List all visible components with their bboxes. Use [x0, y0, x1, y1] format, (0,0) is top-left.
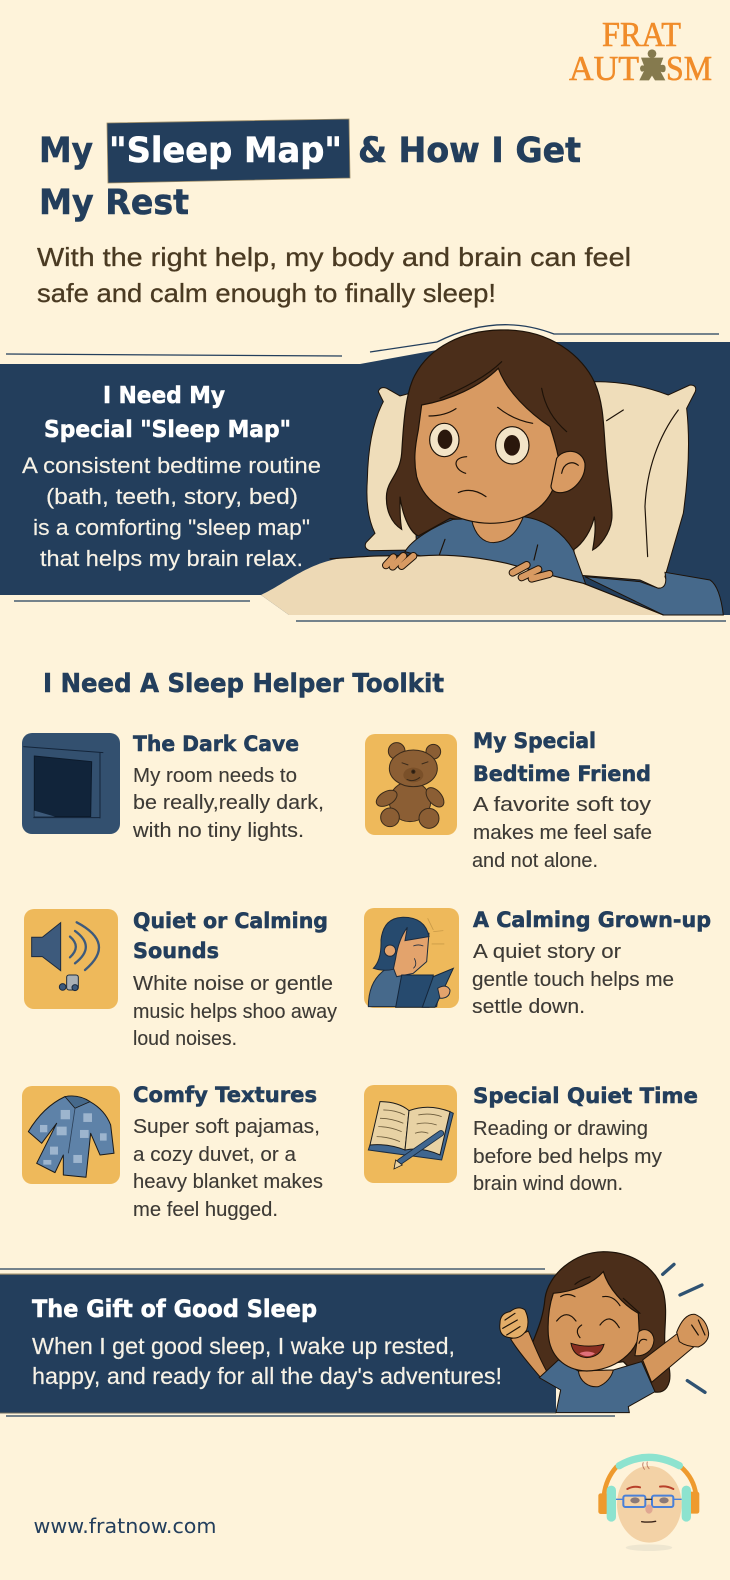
icon: pajamas — [22, 1086, 120, 1184]
title: "Sleep Map" — [109, 131, 342, 171]
text: Comfy Textures — [133, 1083, 323, 1221]
panel: sleep map band — [0, 325, 730, 621]
text: The Dark Cave: with no tiny lights. — [132, 820, 304, 842]
text: Comfy Textures: a cozy duvet, or a — [133, 1144, 297, 1166]
text: Quiet or Calming Sounds: music helps shoo away — [133, 1001, 337, 1023]
icon: grown-up reading — [364, 908, 459, 1008]
icon: mascot with headphones — [598, 1457, 699, 1551]
text: bedtime routine description: (bath, teeth, story, bed) — [46, 484, 298, 509]
section heading: toolkit: I Need A Sleep Helper Toolkit — [43, 669, 444, 699]
text: Quiet or Calming Sounds: White noise or gentle — [133, 973, 333, 995]
title: & How I Get — [358, 131, 581, 171]
icon: speaker — [24, 909, 118, 1009]
heading: I Need My Special Sleep Map: Special "Sleep Map" — [44, 417, 291, 443]
text: Quiet or Calming Sounds — [133, 909, 337, 1050]
right hand — [513, 565, 549, 579]
text: Quiet or Calming Sounds: Sounds — [133, 939, 219, 963]
text: The Dark Cave — [132, 732, 324, 842]
logo: Frat Autism: FRAT — [602, 15, 681, 54]
logo: Frat Autism: AUT — [569, 49, 639, 88]
item: Quiet or Calming Sounds — [24, 909, 337, 1050]
icon: teddy bear — [365, 734, 457, 835]
text: My Special Bedtime Friend: makes me feel safe — [473, 822, 652, 844]
text: Special Quiet Time: brain wind down. — [473, 1173, 623, 1195]
text: My Special Bedtime Friend: and not alone. — [472, 850, 598, 872]
left hand — [386, 556, 413, 567]
text: The Dark Cave: My room needs to — [133, 765, 297, 787]
website url: www.fratnow.com — [34, 1514, 217, 1538]
text: The Dark Cave: The Dark Cave — [133, 732, 299, 756]
heading: I Need My Special Sleep Map — [44, 383, 291, 443]
illustration: worried girl in bed — [261, 330, 723, 615]
title: My — [39, 131, 93, 171]
text: A Calming Grown-up: gentle touch helps me — [472, 969, 674, 991]
text: A Calming Grown-up: A Calming Grown-up — [473, 908, 711, 932]
text: good sleep description: When I get good sleep, I wake up rested, — [32, 1333, 455, 1359]
text: My Special Bedtime Friend — [472, 729, 652, 872]
subtitle — [37, 242, 631, 308]
title — [39, 119, 581, 223]
text: bedtime routine description — [22, 453, 321, 571]
item: The Dark Cave — [22, 732, 324, 842]
text: My Special Bedtime Friend: Bedtime Friend — [473, 762, 651, 786]
text: Special Quiet Time: Special Quiet Time — [473, 1084, 698, 1108]
text: A Calming Grown-up: A quiet story or — [473, 941, 621, 963]
text: Special Quiet Time: Reading or drawing — [473, 1118, 648, 1140]
logo: Frat Autism: SM — [666, 49, 712, 88]
item: A Calming Grown-up — [364, 908, 711, 1018]
text: Comfy Textures: me feel hugged. — [133, 1199, 278, 1221]
heading: The Gift of Good Sleep: The Gift of Good Sleep — [32, 1295, 317, 1323]
text: A Calming Grown-up: settle down. — [472, 996, 585, 1018]
text: Quiet or Calming Sounds: Quiet or Calming — [133, 909, 328, 933]
text: My Special Bedtime Friend: A favorite soft toy — [473, 794, 651, 816]
text: Comfy Textures: heavy blanket makes — [133, 1171, 323, 1193]
item: Special Quiet Time — [364, 1084, 698, 1195]
heading: I Need My Special Sleep Map: I Need My — [103, 383, 225, 409]
illustration: happy girl — [500, 1252, 709, 1413]
text: Quiet or Calming Sounds: loud noises. — [133, 1028, 237, 1050]
subtitle: With the right help, my body and brain can feel — [37, 242, 631, 272]
panel: gift of good sleep — [0, 1252, 709, 1416]
text: Comfy Textures: Super soft pajamas, — [133, 1116, 320, 1138]
text: bedtime routine description: is a comforting "sleep map" — [33, 515, 310, 540]
text: good sleep description — [32, 1333, 502, 1389]
subtitle: safe and calm enough to finally sleep! — [37, 278, 496, 308]
text: good sleep description: happy, and ready for all the day's adventures! — [32, 1363, 502, 1389]
item: Comfy Textures — [22, 1083, 323, 1221]
logo: Frat Autism — [569, 15, 712, 88]
text: Comfy Textures: Comfy Textures — [133, 1083, 317, 1107]
title: My Rest — [39, 183, 189, 223]
text: Special Quiet Time: before bed helps my — [473, 1146, 662, 1168]
text: A Calming Grown-up — [472, 908, 711, 1018]
icon: dark window — [22, 733, 120, 834]
icon: open book and pencil — [364, 1085, 457, 1183]
text: Special Quiet Time — [473, 1084, 698, 1195]
text: The Dark Cave: be really,really dark, — [133, 792, 324, 814]
text: bedtime routine description: that helps my brain relax. — [40, 546, 303, 571]
text: bedtime routine description: A consistent bedtime routine — [22, 453, 321, 478]
text: My Special Bedtime Friend: My Special — [473, 729, 596, 753]
item: My Special Bedtime Friend — [365, 729, 652, 872]
